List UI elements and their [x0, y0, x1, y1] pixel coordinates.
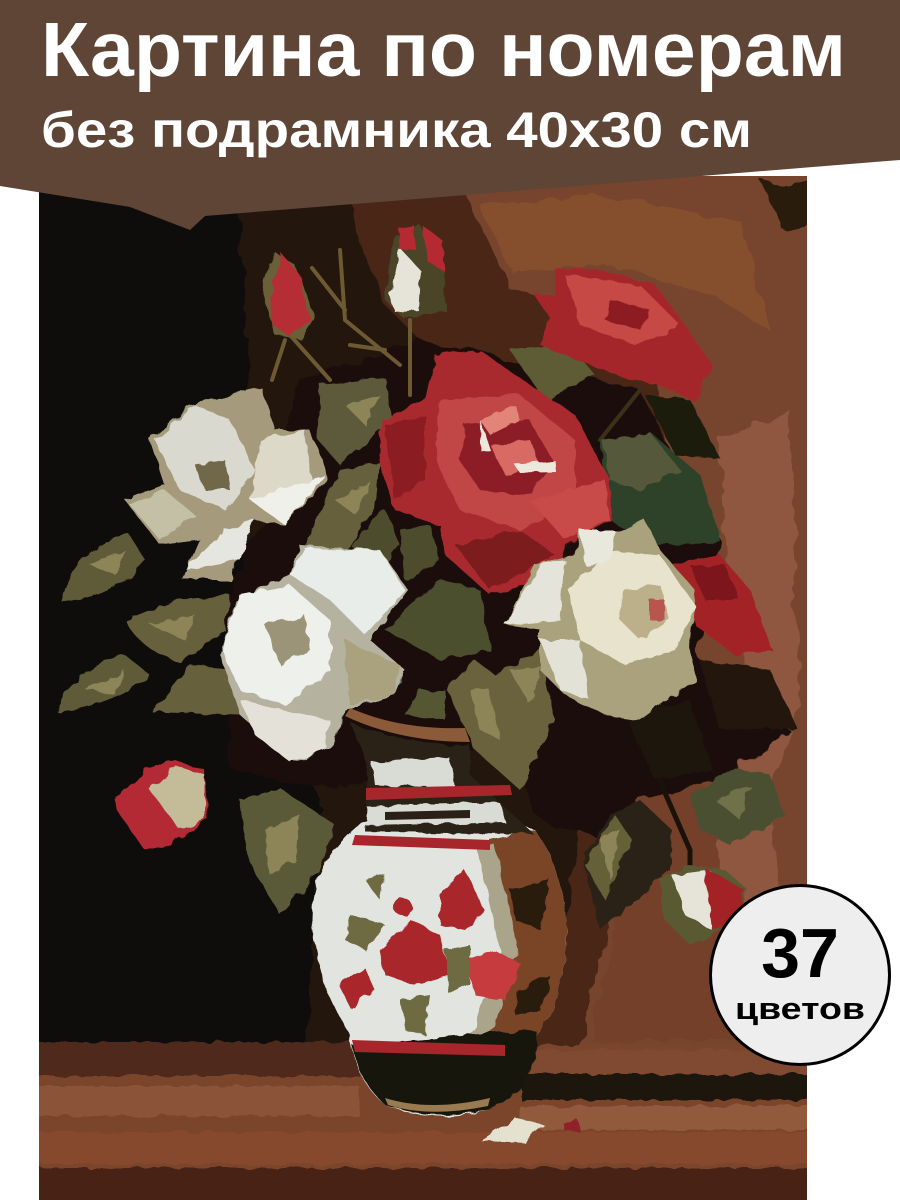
vase shaded side [489, 830, 568, 1036]
header banner [0, 0, 900, 230]
white rose lower left [220, 545, 408, 762]
leaves [57, 345, 797, 930]
leaf highlights [85, 395, 750, 880]
badge number: 37 [761, 914, 839, 992]
title: Картина по номерам [41, 7, 846, 93]
white rose upper left [125, 388, 328, 580]
dark backdrop behind bouquet [225, 340, 790, 840]
cream rose right [505, 520, 695, 720]
fallen petals [480, 1118, 580, 1143]
badge label: цветов [735, 991, 865, 1026]
rose buds [115, 225, 748, 945]
vase [312, 708, 566, 1116]
vase body [312, 820, 566, 1116]
painting: roses in a vase [30, 170, 820, 1200]
vase floral decoration [338, 870, 550, 1035]
large red rose [378, 350, 612, 595]
stems and twigs [272, 250, 690, 880]
painting background [39, 176, 807, 1047]
subtitle: без подрамника 40х30 см [41, 102, 752, 158]
badge: 37 colours [710, 886, 890, 1064]
red rose behind cream rose [670, 555, 772, 655]
upper red rose [532, 268, 712, 402]
vase base [352, 1030, 535, 1115]
table [30, 1042, 820, 1200]
vase neck band [350, 722, 535, 835]
